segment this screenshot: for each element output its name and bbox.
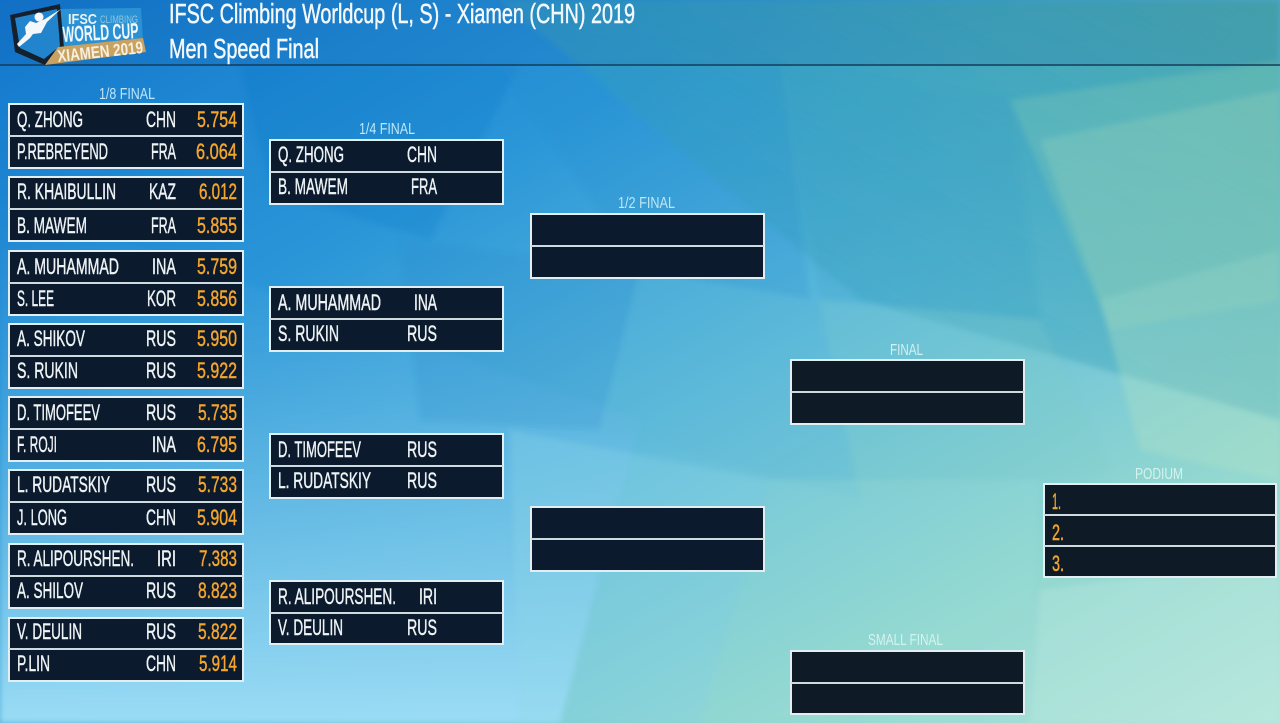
heat 8 — [9, 618, 243, 681]
panel: small final — [791, 651, 1024, 714]
quarter final 1: FRA — [411, 174, 437, 199]
logo: IFSC Climbing World Cup Xiamen 2019: XIAMEN 2019 — [56, 38, 144, 66]
heat 7: RUS — [146, 578, 176, 603]
heat 7: R. ALIPOURSHEN. — [17, 546, 134, 571]
title: Men Speed Final — [169, 33, 319, 64]
heat 4: RUS — [146, 326, 176, 351]
heading: 1/4 final: 1/4 FINAL — [359, 121, 415, 138]
heat 6: 5.904 — [197, 505, 237, 530]
heat 2: 5.855 — [197, 213, 237, 238]
quarter final 3: D. TIMOFEEV — [278, 437, 361, 462]
quarter final 4: IRI — [419, 584, 437, 609]
heat 1 — [9, 104, 243, 168]
heat 2: R. KHAIBULLIN — [17, 179, 116, 204]
heat 5: D. TIMOFEEV — [17, 400, 100, 425]
header divider line — [0, 64, 1280, 66]
heat 4 — [9, 324, 243, 388]
heat 4: 5.950 — [197, 326, 237, 351]
icon: climber — [17, 9, 61, 47]
panel: podium: 2. — [1052, 520, 1064, 545]
quarter final 1: Q. ZHONG — [278, 142, 344, 167]
heat 1: 6.064 — [196, 139, 237, 164]
heading: final: FINAL — [890, 342, 923, 359]
quarter final 4: V. DEULIN — [278, 615, 343, 640]
quarter final 2 — [270, 287, 503, 351]
heat 1: FRA — [151, 139, 176, 164]
heat 1: 5.754 — [197, 107, 237, 132]
heat 6: CHN — [146, 505, 176, 530]
panel: 1/4 final heats — [270, 140, 503, 644]
heat 6: L. RUDATSKIY — [17, 472, 110, 497]
heat 1: CHN — [146, 107, 176, 132]
heat 7 — [9, 544, 243, 608]
heat 7: A. SHILOV — [17, 578, 83, 603]
heat 5 — [9, 397, 243, 461]
quarter final 4: RUS — [407, 615, 437, 640]
logo: IFSC Climbing World Cup Xiamen 2019: IFSC — [68, 11, 97, 28]
heat 5: 5.735 — [198, 400, 237, 425]
heat 3: S. LEE — [17, 286, 54, 311]
heat 6: 5.733 — [198, 472, 237, 497]
heat 3: 5.759 — [197, 254, 237, 279]
heading: podium: PODIUM — [1135, 466, 1183, 483]
heat 2 — [9, 177, 243, 241]
quarter final 3: RUS — [407, 468, 437, 493]
quarter final 3: RUS — [407, 437, 437, 462]
panel: 1/8 final heats — [9, 104, 243, 681]
quarter final 1: CHN — [407, 142, 437, 167]
panel: podium — [1044, 484, 1276, 577]
heat 5: RUS — [146, 400, 176, 425]
quarter final 1 — [270, 140, 503, 204]
logo: IFSC Climbing World Cup Xiamen 2019: WORLD CUP — [62, 18, 139, 47]
heat 7: 8.823 — [198, 578, 237, 603]
quarter final 1: B. MAWEM — [278, 174, 348, 199]
heat 1: P.REBREYEND — [17, 139, 108, 164]
heat 8: 5.914 — [199, 651, 237, 676]
heat 8: 5.822 — [198, 619, 237, 644]
panel: podium: 1. — [1052, 489, 1061, 514]
heat 5: INA — [152, 432, 176, 457]
quarter final 4: R. ALIPOURSHEN. — [278, 584, 396, 609]
quarter final 2: RUS — [407, 321, 437, 346]
heat 6: RUS — [146, 472, 176, 497]
heat 4: A. SHIKOV — [17, 326, 85, 351]
heat 4: 5.922 — [197, 358, 237, 383]
quarter final 2: S. RUKIN — [278, 321, 339, 346]
panel: semi final 2 — [531, 507, 764, 571]
panel: semi final 1 — [531, 214, 764, 278]
quarter final 2: A. MUHAMMAD — [278, 290, 381, 315]
heat 3: A. MUHAMMAD — [17, 254, 119, 279]
title — [169, 0, 635, 64]
heat 4: RUS — [146, 358, 176, 383]
heading: 1/2 final: 1/2 FINAL — [618, 195, 675, 212]
heat 2: B. MAWEM — [17, 213, 87, 238]
panel: podium: 3. — [1052, 551, 1064, 576]
heat 3 — [9, 251, 243, 315]
heat 2: KAZ — [149, 179, 176, 204]
logo: IFSC Climbing World Cup Xiamen 2019 — [10, 4, 146, 66]
heat 5: F. ROJI — [17, 432, 57, 457]
heading: small final: SMALL FINAL — [868, 632, 943, 649]
heat 8: RUS — [146, 619, 176, 644]
heat 3: KOR — [147, 286, 176, 311]
heat 6 — [9, 470, 243, 534]
heat 8: CHN — [146, 651, 176, 676]
heat 7: IRI — [157, 546, 176, 571]
heat 6: J. LONG — [17, 505, 67, 530]
quarter final 3: L. RUDATSKIY — [278, 468, 371, 493]
heat 3: INA — [152, 254, 176, 279]
quarter final 2: INA — [414, 290, 437, 315]
logo: IFSC Climbing World Cup Xiamen 2019: CLIMBING — [100, 14, 138, 26]
heat 8: P.LIN — [17, 651, 50, 676]
heading: 1/8 final: 1/8 FINAL — [99, 86, 155, 103]
panel: final — [791, 360, 1024, 424]
heat 2: 6.012 — [199, 179, 237, 204]
heat 5: 6.795 — [197, 432, 237, 457]
heat 1: Q. ZHONG — [17, 107, 83, 132]
quarter final 4 — [270, 581, 503, 644]
heat 2: FRA — [151, 213, 176, 238]
heat 7: 7.383 — [199, 546, 237, 571]
quarter final 3 — [270, 434, 503, 498]
heat 8: V. DEULIN — [17, 619, 82, 644]
heat 3: 5.856 — [197, 286, 237, 311]
heat 4: S. RUKIN — [17, 358, 78, 383]
